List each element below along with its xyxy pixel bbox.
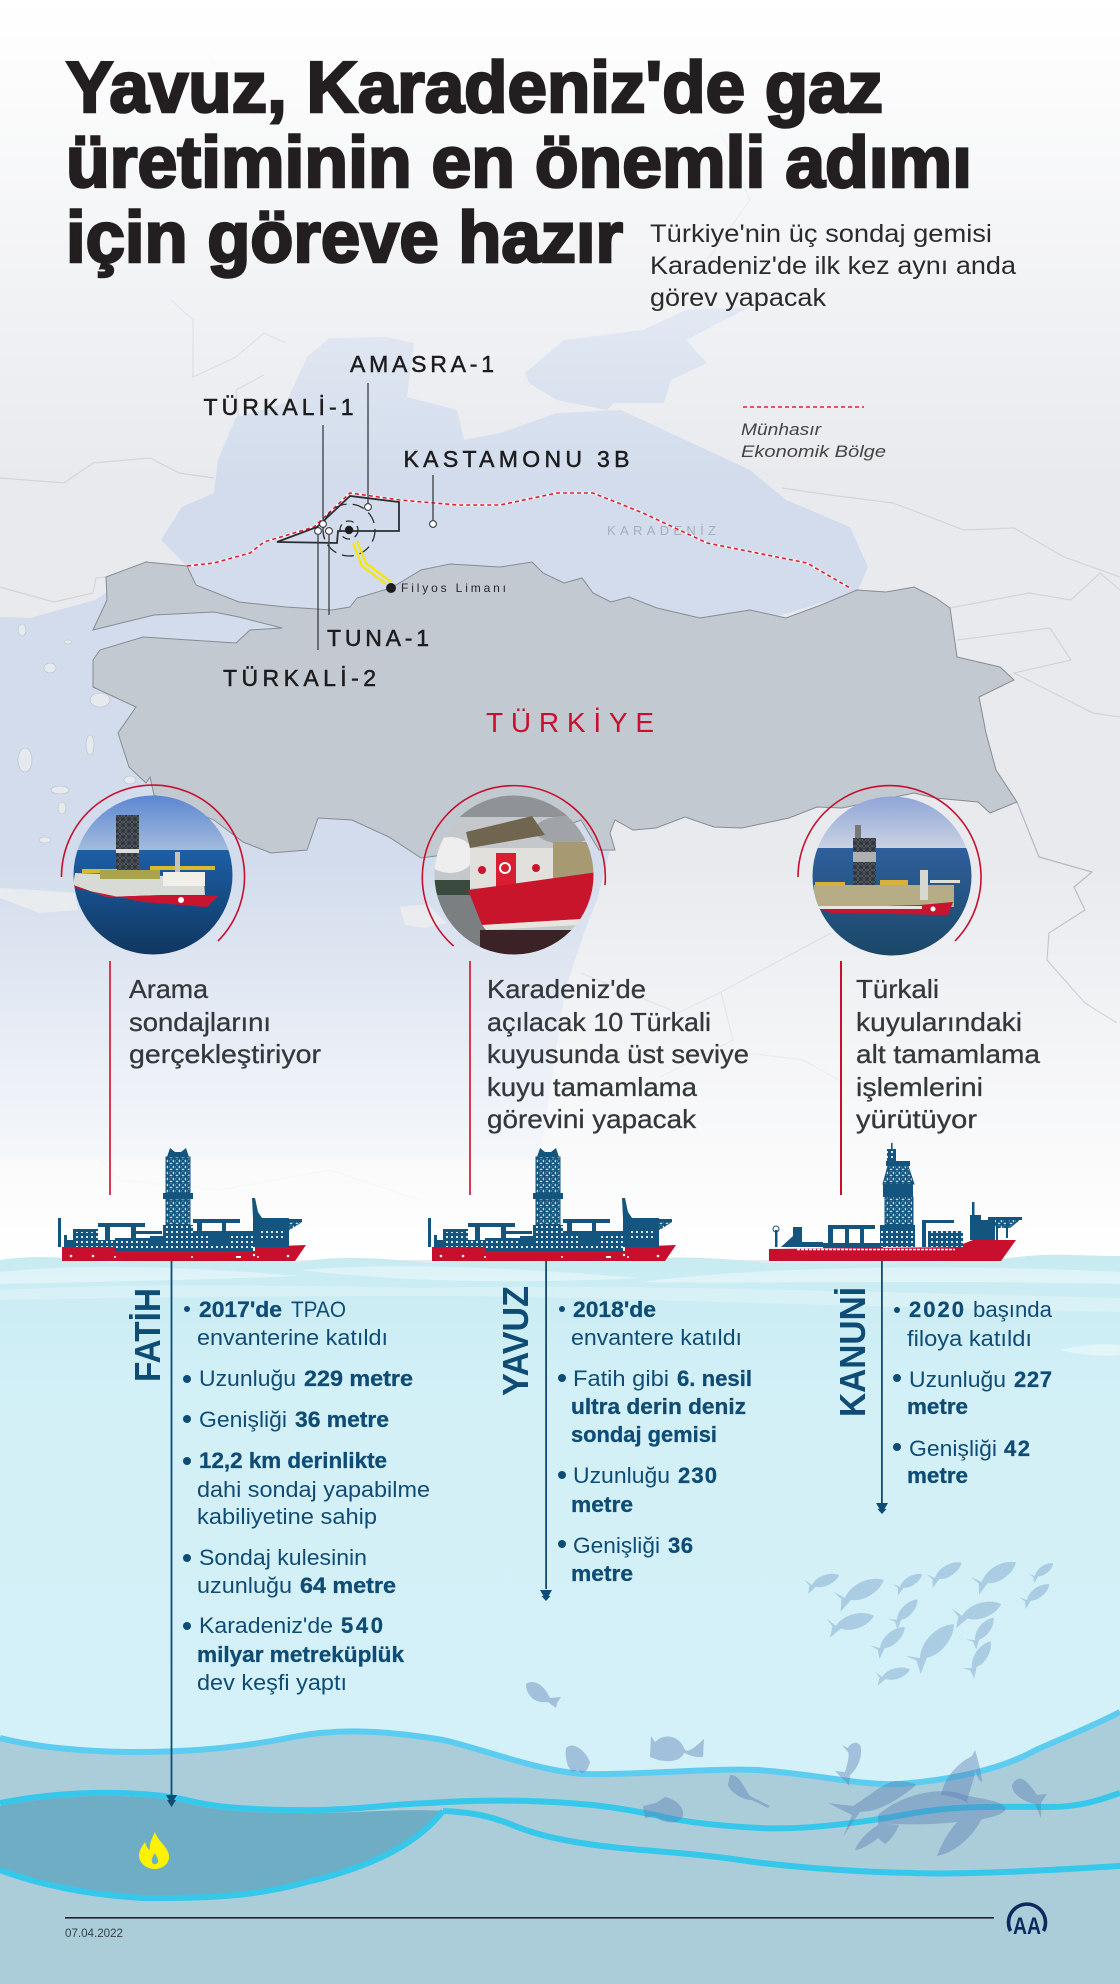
marine life silhouettes — [526, 1682, 1047, 1856]
fish — [643, 1797, 683, 1822]
text block: Kanuni role: işlemlerini — [856, 1072, 983, 1102]
panel: seabed — [0, 1712, 1120, 1984]
Sakarya field target — [323, 504, 375, 556]
label: Tuna-1 — [326, 528, 429, 651]
icon: gas flame — [139, 1832, 169, 1869]
fact list: metre — [907, 1463, 968, 1488]
subtitle: Karadeniz'de ilk kez aynı anda — [650, 252, 1016, 280]
fact list: dev keşfi yaptı — [197, 1670, 347, 1695]
label: Türkali-1 — [204, 394, 354, 527]
dolphin — [835, 1743, 861, 1786]
label: Türkali-2: TÜRKALİ-2 — [223, 665, 376, 691]
fish pair — [650, 1736, 704, 1761]
fact list: Sondaj kulesinin — [199, 1545, 367, 1570]
subtitle: görev yapacak — [650, 284, 827, 312]
exclusive economic zone line — [187, 493, 850, 588]
fact list — [558, 1297, 752, 1586]
label: Amasra-1: AMASRA-1 — [350, 351, 494, 377]
round fish — [526, 1682, 561, 1708]
licence block outline — [277, 496, 399, 543]
panel: neighbouring country borders — [0, 40, 1120, 1200]
panel: Cyprus — [400, 904, 446, 928]
fact list: Uzunluğu — [909, 1367, 1006, 1392]
panel: Crete — [0, 888, 78, 913]
lower right line — [443, 1811, 1120, 1873]
fact list: Uzunluğu — [573, 1463, 670, 1488]
label: Amasra-1 — [350, 351, 494, 510]
fact list: milyar metreküplük — [197, 1642, 405, 1667]
text block: Yavuz role: kuyu tamamlama — [487, 1072, 698, 1102]
large fish — [941, 1750, 982, 1803]
text block: Yavuz role: görevini yapacak — [487, 1104, 697, 1134]
drill string and facts: Fatih — [127, 1261, 430, 1807]
large fish — [828, 1781, 916, 1837]
fact list: 42 — [1004, 1436, 1030, 1461]
footer rule — [65, 1917, 994, 1919]
fact list: 2018'de — [573, 1297, 656, 1322]
text block: Yavuz role: Karadeniz'de — [487, 974, 646, 1004]
ship: Kanuni — [769, 1143, 1022, 1261]
fact list: filoya katıldı — [907, 1326, 1032, 1351]
drill line — [876, 1261, 888, 1514]
fact list: envantere katıldı — [571, 1325, 742, 1350]
fact list: metre — [571, 1492, 633, 1517]
fact list: TPAO — [291, 1297, 346, 1322]
legend: Münhasır Ekonomik Bölge: Ekonomik Bölge — [741, 442, 886, 461]
photo: Yavuz ship — [422, 786, 605, 956]
ship name: FATİH — [127, 1288, 168, 1382]
text block: Kanuni role: yürütüyor — [856, 1104, 977, 1134]
fact list: 227 — [1014, 1367, 1052, 1392]
panel: Black Sea — [161, 337, 868, 640]
ship name: YAVUZ — [495, 1286, 536, 1396]
fish — [728, 1775, 770, 1808]
fact list: dahi sondaj yapabilme — [197, 1477, 430, 1502]
fact list: Genişliği — [573, 1533, 660, 1558]
drill line — [166, 1261, 177, 1807]
fact list: başında — [973, 1297, 1053, 1322]
fact list: kabiliyetine sahip — [197, 1504, 377, 1529]
fact list: 6. nesil — [677, 1366, 752, 1391]
fact list: 540 — [341, 1613, 383, 1638]
legend: Münhasır Ekonomik Bölge — [741, 407, 886, 461]
ship: Yavuz — [428, 1148, 676, 1261]
legend: Münhasır Ekonomik Bölge: Münhasır — [741, 420, 822, 439]
subtitle — [650, 220, 1016, 312]
drill string and facts: Kanuni — [832, 1261, 1053, 1514]
text block: Kanuni role — [840, 961, 1041, 1195]
sea label: Karadeniz: KARADENİZ — [607, 523, 716, 538]
fact list: uzunluğu — [197, 1573, 292, 1598]
date: 07.04.2022 — [65, 1926, 123, 1940]
gas pipeline to Filyos — [353, 541, 391, 584]
fact list: 12,2 km derinlikte — [199, 1448, 387, 1473]
text block: Kanuni role: kuyularındaki — [856, 1007, 1022, 1037]
panel: gas reservoir — [0, 1796, 443, 1898]
title: üretiminin en önemli adımı — [66, 123, 972, 203]
fact list: metre — [571, 1561, 633, 1586]
drill line — [540, 1261, 552, 1601]
turtle — [855, 1791, 1006, 1856]
fact list: Fatih gibi — [573, 1366, 669, 1391]
text block: Yavuz role: açılacak 10 Türkali — [487, 1007, 711, 1037]
fish school — [804, 1557, 1057, 1686]
Filyos port marker: Filyos Limanı — [401, 581, 506, 595]
fact list — [183, 1297, 430, 1695]
reservoir bottom line — [0, 1811, 443, 1898]
drill string and facts: Yavuz — [495, 1261, 752, 1601]
descriptions — [109, 961, 1041, 1195]
label: Kastamonu 3B — [404, 446, 630, 527]
country label: Türkiye: TÜRKİYE — [486, 707, 654, 738]
well labels and leader lines — [204, 351, 630, 691]
fact list: 36 — [668, 1533, 693, 1558]
fact list: Karadeniz'de — [199, 1613, 333, 1638]
fact list: 64 metre — [300, 1573, 396, 1598]
seabed layers — [0, 1712, 1120, 1984]
ship: Fatih — [58, 1148, 306, 1261]
title — [66, 48, 972, 278]
fact list: 229 metre — [304, 1366, 413, 1391]
fact list: Genişliği — [909, 1436, 997, 1461]
upper seabed line — [0, 1712, 1120, 1784]
label: Türkali-2 — [223, 528, 376, 691]
text block: Kanuni role: alt tamamlama — [856, 1039, 1041, 1069]
icon: Anadolu Agency logo: AA — [1013, 1913, 1041, 1940]
panel: Sea of Azov — [525, 307, 750, 410]
text block: Fatih role: gerçekleştiriyor — [129, 1039, 321, 1069]
title: Yavuz, Karadeniz'de gaz — [66, 48, 883, 128]
fact list — [893, 1297, 1053, 1488]
fact list: envanterine katıldı — [197, 1325, 388, 1350]
fact list: ultra derin deniz — [571, 1394, 746, 1419]
text block: Fatih role: sondajlarını — [129, 1007, 271, 1037]
fact list: 36 metre — [295, 1407, 389, 1432]
panel: Mediterranean and Aegean — [0, 590, 610, 1160]
icon: Anadolu Agency logo — [1008, 1904, 1046, 1940]
label: Tuna-1: TUNA-1 — [327, 625, 429, 651]
label: Kastamonu 3B: KASTAMONU 3B — [404, 446, 630, 472]
subtitle: Türkiye'nin üç sondaj gemisi — [650, 220, 992, 248]
fish — [1012, 1779, 1047, 1818]
text block: Kanuni role: Türkali — [856, 974, 939, 1004]
panel: Aegean islands — [18, 624, 136, 843]
fact list: sondaj gemisi — [571, 1422, 717, 1447]
sea — [0, 1255, 1120, 1984]
map of Black Sea region — [0, 0, 1120, 1260]
text block: Yavuz role — [469, 961, 749, 1195]
middle line — [0, 1793, 1120, 1828]
fact list: 2020 — [909, 1297, 964, 1322]
text block: Fatih role: Arama — [129, 974, 209, 1004]
label: Türkali-1: TÜRKALİ-1 — [204, 394, 354, 420]
fact list: Uzunluğu — [199, 1366, 296, 1391]
title: için göreve hazır — [66, 198, 623, 278]
photo: Kanuni ship — [798, 786, 981, 958]
fact list: 2017'de — [199, 1297, 282, 1322]
photo: Fatih ship — [61, 785, 244, 956]
text block: Yavuz role: kuyusunda üst seviye — [487, 1039, 749, 1069]
panel: Türkiye landmass — [93, 562, 1017, 858]
text block: Fatih role — [109, 961, 321, 1195]
fact list: Genişliği — [199, 1407, 287, 1432]
fact list: metre — [907, 1394, 968, 1419]
fade overlays — [0, 0, 1120, 480]
small fish — [566, 1746, 590, 1773]
fact list: 230 — [678, 1463, 717, 1488]
ship name: KANUNİ — [832, 1287, 873, 1417]
